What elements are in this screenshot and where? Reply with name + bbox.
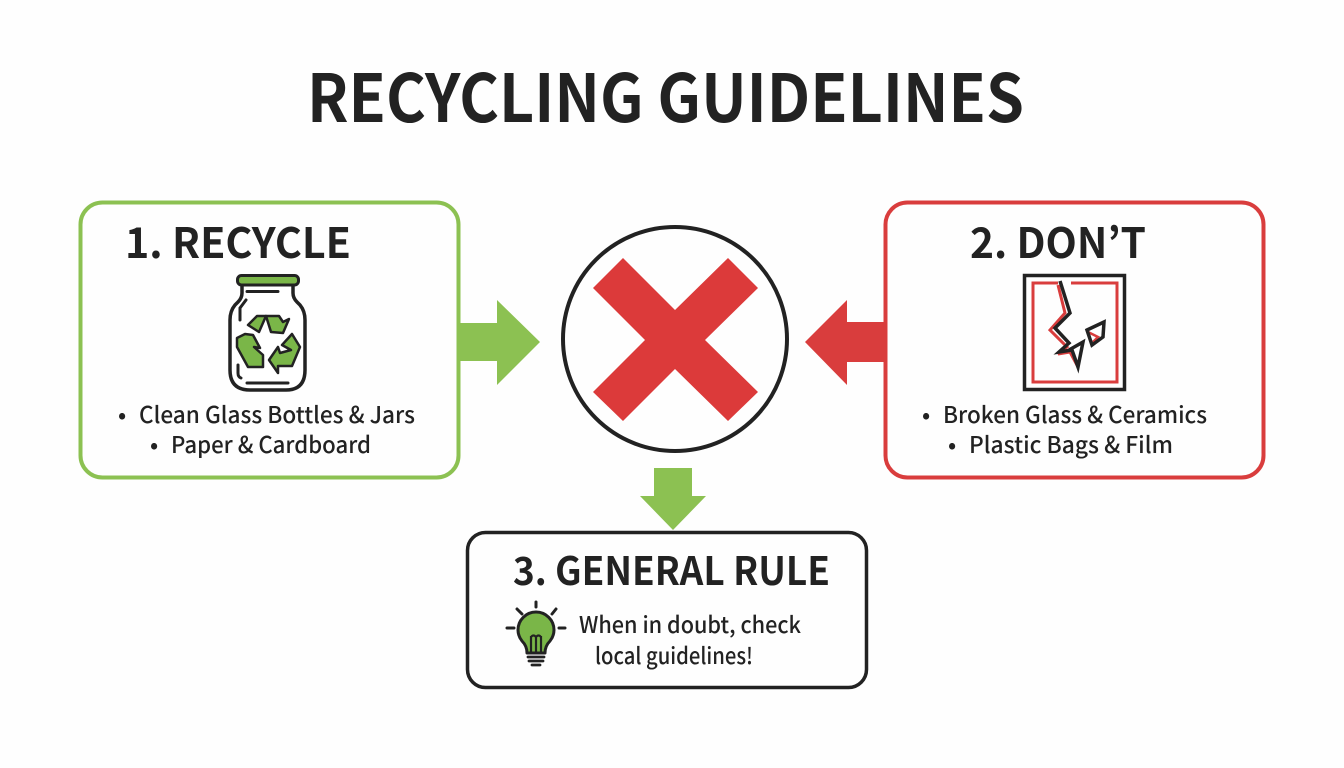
heading: recycle: 1. RECYCLE [125, 210, 351, 271]
list: recycle items: • [150, 426, 158, 460]
icon: jar with recycling symbol [230, 276, 305, 390]
arrow: recycle to center [459, 300, 540, 385]
heading: don't: 2. DON’T [970, 210, 1146, 271]
list: recycle items: Paper & Cardboard [171, 426, 371, 460]
text: general rule: When in doubt, check [579, 606, 801, 640]
list: don't items: Broken Glass & Ceramics [943, 396, 1207, 430]
title: RECYCLING GUIDELINES [307, 46, 1024, 142]
list: don't items [922, 396, 1207, 460]
panel: general rule [468, 532, 866, 688]
list: recycle items: Clean Glass Bottles & Jars [139, 396, 415, 430]
arrow: don't to center [805, 300, 885, 385]
list: recycle items [118, 396, 415, 460]
list: don't items: • [948, 426, 956, 460]
icon: broken glass [1024, 276, 1124, 390]
list: don't items: • [922, 396, 930, 430]
text: general rule: local guidelines! [595, 637, 753, 671]
list: don't items: Plastic Bags & Film [969, 426, 1173, 460]
icon: center X in circle [563, 227, 787, 451]
panel: recycle [80, 202, 458, 478]
list: recycle items: • [118, 396, 126, 430]
panel: don't [886, 202, 1264, 478]
heading: general rule: 3. GENERAL RULE [513, 541, 830, 597]
arrow: center to general rule [640, 468, 706, 530]
icon: light bulb [507, 602, 565, 665]
text: general rule [579, 606, 801, 671]
